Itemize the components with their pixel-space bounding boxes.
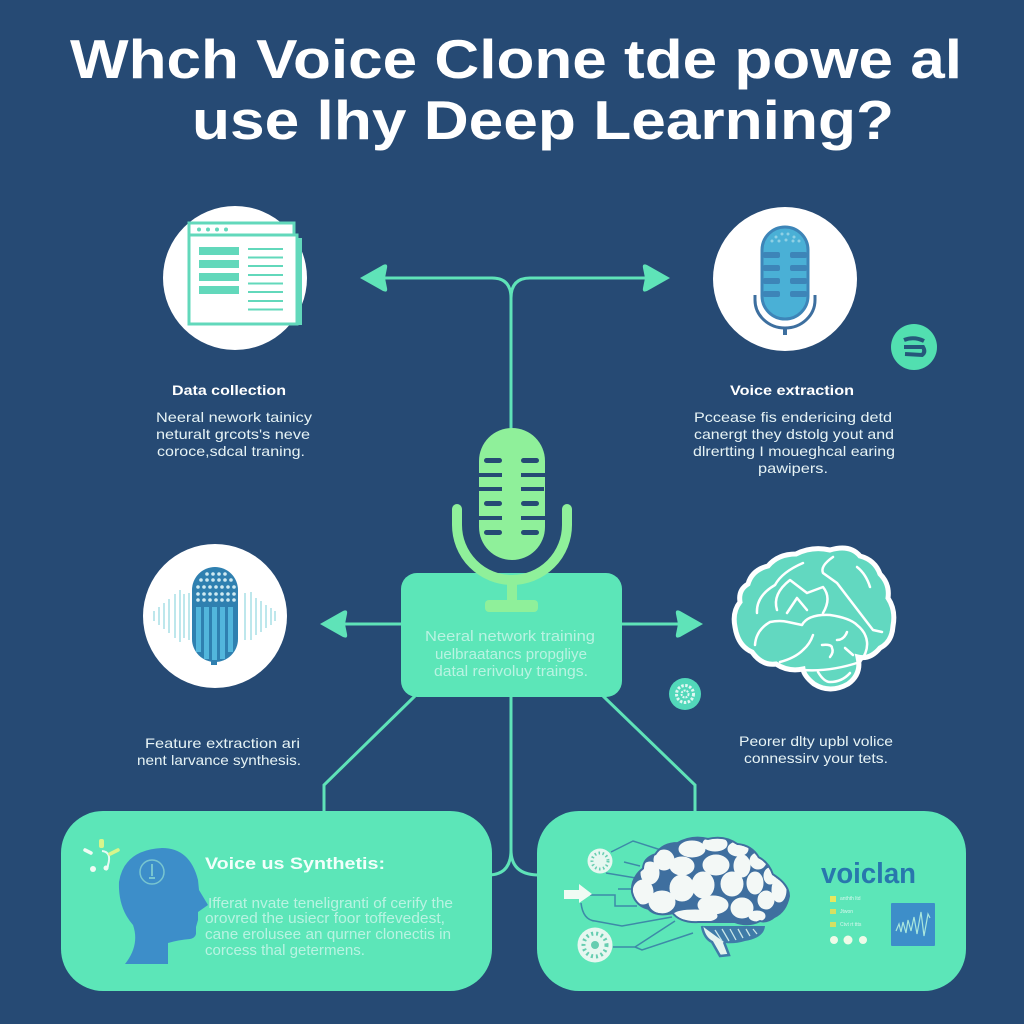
legend list bbox=[830, 896, 867, 944]
arrow: top left bbox=[360, 264, 387, 292]
text: data collection description bbox=[156, 409, 312, 459]
text: voice synthesis description: cane erolusee an qurner clonectis in bbox=[205, 927, 451, 943]
arrow: middle left bbox=[320, 610, 347, 638]
title: Whch Voice Clone tde powe al bbox=[70, 28, 962, 90]
legend list: Ctvt rt ttts bbox=[840, 922, 862, 928]
panel: central neural network training bbox=[401, 428, 622, 697]
icon: browser window bbox=[163, 206, 307, 350]
text: voice extraction description: pawipers. bbox=[758, 460, 828, 476]
icon: small teal neuron badge bbox=[669, 678, 701, 710]
icon: waveform chart bbox=[891, 903, 935, 946]
icon: head silhouette bbox=[119, 848, 208, 964]
panel: data collection bbox=[156, 206, 312, 459]
icon: white arrow bbox=[564, 884, 592, 903]
icon: white lobed brain bbox=[633, 839, 788, 956]
arrow: top right bbox=[643, 264, 670, 292]
text: feature extraction description bbox=[137, 735, 301, 768]
icon: small green badge bbox=[891, 324, 937, 370]
text: voice synthesis description bbox=[205, 896, 453, 959]
text: voice extraction description: canergt they dstolg yout and bbox=[694, 426, 894, 442]
central box bbox=[401, 573, 622, 697]
icon: neural link lines bbox=[581, 841, 693, 950]
panel: feature extraction bbox=[137, 544, 301, 768]
text: feature extraction description: nent larvance synthesis. bbox=[137, 752, 301, 768]
icon: teal brain bbox=[734, 548, 894, 689]
brand name: voiclan bbox=[821, 858, 916, 890]
heading: data collection: Data collection bbox=[172, 382, 286, 398]
text: brain description bbox=[739, 733, 893, 766]
text: central description: uelbraatancs propgliye bbox=[435, 646, 587, 663]
panel: brain bbox=[669, 548, 894, 766]
text: central description bbox=[425, 628, 595, 680]
icon: microphone in circle bbox=[713, 207, 857, 351]
text: central description: datal rerivoluy traings. bbox=[434, 663, 588, 680]
text: voice synthesis description: orovred the usiecr foor toffevedest, bbox=[205, 911, 445, 927]
legend list: anthth ltd bbox=[840, 896, 861, 902]
icon: neuron node top bbox=[588, 848, 612, 874]
text: feature extraction description: Feature extraction ari bbox=[145, 735, 300, 751]
panel: voice clone model bbox=[537, 811, 966, 991]
arrow: middle right bbox=[676, 610, 703, 638]
card background bbox=[61, 811, 492, 991]
text: voice synthesis description: Ifferat nvate teneligranti of cerify the bbox=[208, 896, 453, 912]
text: brain description: Peorer dlty upbl volice bbox=[739, 733, 893, 749]
text: data collection description: neturalt grcots's neve bbox=[156, 426, 310, 442]
text: data collection description: coroce,sdcal traning. bbox=[157, 443, 305, 459]
text: voice extraction description bbox=[693, 409, 895, 476]
icon: idea sparks bbox=[85, 839, 118, 872]
text: voice extraction description: Pccease fis endericing detd bbox=[694, 409, 892, 425]
panel: voice extraction bbox=[693, 207, 937, 476]
text: data collection description: Neeral nework tainicy bbox=[156, 409, 312, 425]
title: use lhy Deep Learning? bbox=[192, 89, 894, 151]
heading: voice extraction: Voice extraction bbox=[730, 382, 854, 398]
text: central description: Neeral network training bbox=[425, 628, 595, 645]
legend list: Jtwon bbox=[840, 909, 853, 915]
card background bbox=[537, 811, 966, 991]
text: voice synthesis description: corcess thal getermens. bbox=[205, 943, 365, 959]
heading: voice synthesis: Voice us Synthetis: bbox=[205, 854, 385, 873]
icon: central microphone bbox=[457, 428, 567, 612]
panel: voice synthesis bbox=[61, 811, 492, 991]
title bbox=[70, 28, 962, 151]
icon: microphone with waveform bbox=[143, 544, 287, 688]
connector lines bbox=[324, 278, 695, 875]
text: voice extraction description: dlrertting I moueghcal earing bbox=[693, 443, 895, 459]
icon: neuron node bottom bbox=[578, 928, 612, 962]
text: brain description: connessirv your tets. bbox=[744, 750, 888, 766]
